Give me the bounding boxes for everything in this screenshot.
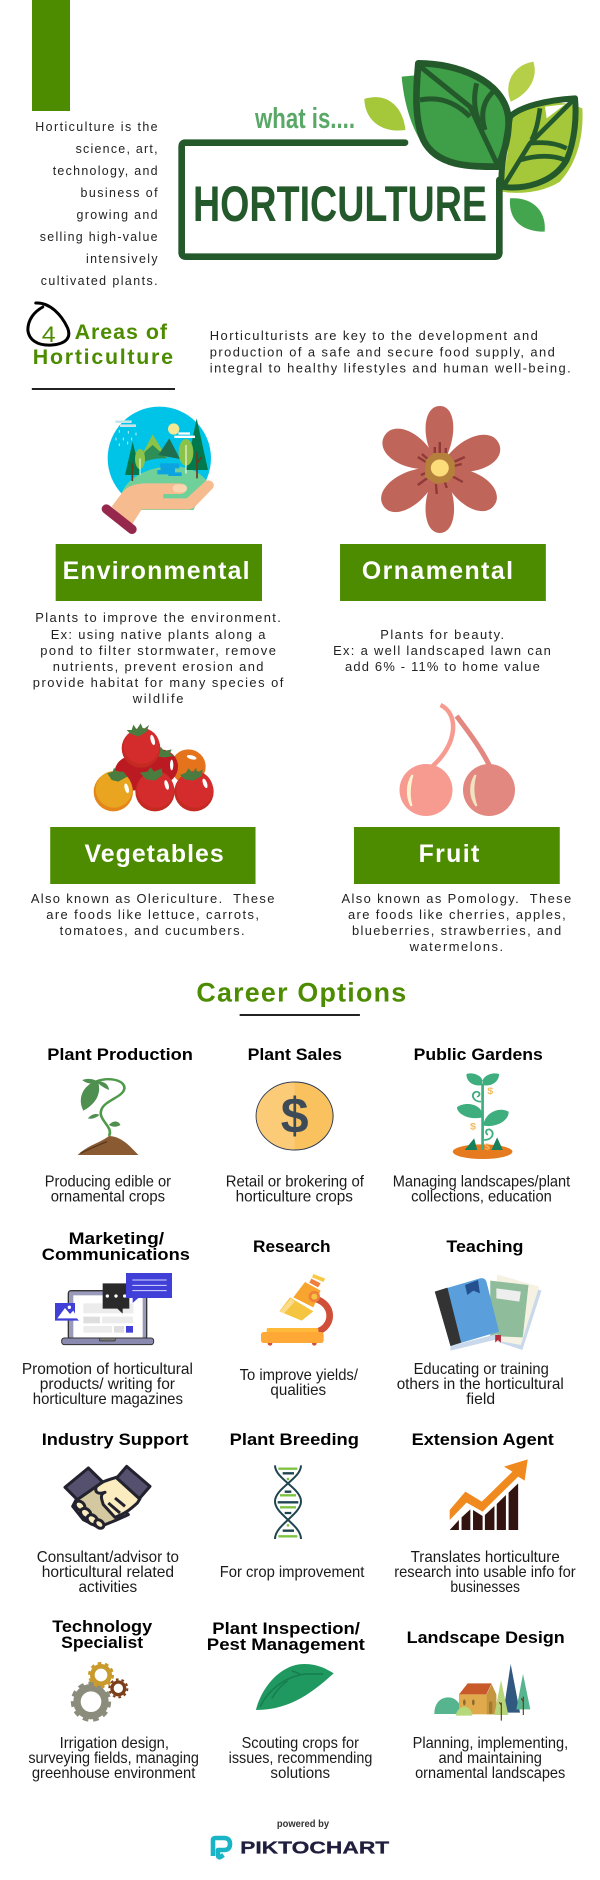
text: fruit description: blueberries, strawberries, and [352, 923, 561, 938]
icon: tomatoes [94, 723, 214, 811]
career: public gardens: collections, education [411, 1188, 552, 1206]
career: landscape design [407, 1629, 568, 1782]
logo: what is horticulture: HORTICULTURE [193, 176, 487, 232]
label bar: environmental [56, 544, 262, 601]
career: plant production: Plant Production [47, 1046, 193, 1064]
top green accent bar [32, 0, 70, 111]
icon: money plant: $ [470, 1122, 476, 1132]
text: ornamental description: Plants for beauty. [380, 627, 504, 642]
icon: dollar coin [256, 1082, 333, 1150]
label bar: vegetables [50, 827, 256, 884]
career: plant production [45, 1046, 193, 1206]
career: technology specialist: Specialist [61, 1634, 144, 1652]
intro text block: business of [81, 186, 158, 200]
career: technology specialist: greenhouse environment [32, 1765, 196, 1782]
icon: money plant [453, 1073, 512, 1159]
icon: hand holding landscape [106, 407, 214, 529]
career: teaching [397, 1238, 564, 1408]
career heading underline [240, 1014, 360, 1016]
intro text block: Horticulture is the [35, 120, 158, 134]
label bar: fruit [354, 827, 560, 884]
intro paragraph: integral to healthy lifestyles and human well-being. [210, 360, 571, 375]
heading: career options: Career Options [196, 977, 406, 1008]
career: plant sales: Retail or brokering of [226, 1173, 364, 1191]
career: marketing communications: products/ writing for [40, 1376, 176, 1393]
text: fruit description: Also known as Pomology. These [342, 891, 571, 906]
icon: microscope [261, 1274, 330, 1346]
icon: dollar coin: $ [281, 1088, 309, 1144]
icon: books [435, 1274, 541, 1351]
icon: flower [374, 406, 505, 533]
intro text block: selling high-value [40, 230, 158, 244]
career: teaching: field [466, 1391, 495, 1408]
career: marketing communications [22, 1230, 193, 1408]
label bar: ornamental [340, 544, 546, 601]
career: technology specialist [28, 1618, 199, 1782]
career: marketing communications: horticulture magazines [33, 1391, 183, 1408]
text: vegetables description: Also known as Olericulture. These [31, 891, 274, 906]
panel: fruit [342, 705, 571, 954]
career: industry support [37, 1431, 189, 1596]
icon: dna helix [275, 1465, 301, 1539]
text: vegetables description: tomatoes, and cucumbers. [60, 923, 245, 938]
career: landscape design: Landscape Design [407, 1629, 565, 1647]
career: plant breeding: For crop improvement [220, 1564, 365, 1581]
footer: powered by piktochart: powered by [277, 1819, 329, 1830]
career: teaching: others in the horticultural [397, 1376, 564, 1393]
intro text block: technology, and [53, 164, 158, 178]
career: research: qualities [270, 1382, 326, 1399]
text: fruit description [342, 891, 571, 954]
icon: money plant: $ [487, 1087, 494, 1097]
career: landscape design: ornamental landscapes [415, 1765, 565, 1782]
career: plant breeding [220, 1431, 365, 1581]
career: extension agent: Extension Agent [412, 1431, 554, 1449]
career: plant inspection pest management: solutions [270, 1765, 330, 1782]
label bar: vegetables: Vegetables [85, 840, 224, 868]
career: extension agent [394, 1431, 576, 1596]
logo: what is horticulture [182, 62, 583, 257]
text: ornamental description [333, 627, 551, 674]
career: plant sales: Plant Sales [248, 1046, 342, 1064]
career: plant inspection pest management: Pest Management [207, 1636, 365, 1654]
heading: 4 areas of horticulture: Horticulture [33, 345, 173, 369]
text: fruit description: watermelons. [409, 939, 503, 954]
label bar: fruit: Fruit [419, 840, 479, 868]
career: industry support: activities [79, 1579, 137, 1596]
icon: cherries [400, 705, 515, 816]
icon: gears [73, 1663, 127, 1720]
career: research: To improve yields/ [240, 1367, 358, 1384]
intro paragraph: Horticulturists are key to the development and [210, 328, 538, 343]
career: landscape design: Planning, implementing, [413, 1735, 568, 1752]
panel: environmental [33, 407, 284, 706]
intro text block: growing and [77, 208, 158, 222]
text: environmental description [33, 610, 284, 706]
icon: laptop with chat bubbles [55, 1273, 172, 1345]
career: extension agent: businesses [450, 1579, 520, 1596]
label bar: ornamental: Ornamental [362, 557, 513, 585]
text: ornamental description: add 6% - 11% to home value [345, 659, 540, 674]
text: environmental description: nutrients, prevent erosion and [53, 659, 263, 674]
heading underline [32, 388, 175, 390]
heading: 4 areas of horticulture: 4 [42, 322, 56, 347]
career: public gardens: Managing landscapes/plant [393, 1173, 571, 1191]
intro text block: cultivated plants. [41, 274, 158, 288]
intro paragraph: production of a safe and secure food supply, and [210, 344, 555, 359]
intro paragraph [210, 328, 571, 375]
icon: house and trees [434, 1664, 530, 1721]
icon: leaf [256, 1664, 334, 1710]
career: plant sales [226, 1046, 364, 1206]
career: industry support: Industry Support [42, 1431, 189, 1449]
career: plant inspection pest management: Scouting crops for [242, 1735, 360, 1752]
text: ornamental description: Ex: a well landscaped lawn can [333, 643, 551, 658]
career: plant production: ornamental crops [51, 1188, 165, 1206]
panel: ornamental [333, 406, 551, 674]
heading: 4 areas of horticulture: Areas of [75, 320, 168, 344]
intro text block [35, 120, 158, 288]
career: research [240, 1238, 358, 1399]
career: public gardens [393, 1046, 571, 1206]
career: plant sales: horticulture crops [236, 1188, 353, 1206]
career: plant inspection pest management: Plant Inspection/ [212, 1620, 360, 1638]
career: public gardens: Public Gardens [414, 1046, 543, 1064]
career: landscape design: and maintaining [438, 1750, 542, 1767]
footer: powered by piktochart [213, 1819, 389, 1858]
text: environmental description: Plants to improve the environment. [35, 610, 281, 625]
career: research: Research [253, 1238, 331, 1256]
career: extension agent: research into usable info for [394, 1564, 576, 1581]
career: plant inspection pest management: issues, recommending [229, 1750, 372, 1767]
career: marketing communications: Communications [42, 1246, 190, 1264]
career: teaching: Educating or training [414, 1361, 549, 1378]
career: technology specialist: Technology [52, 1618, 153, 1636]
career: industry support: Consultant/advisor to [37, 1549, 179, 1566]
text: environmental description: provide habitat for many species of [33, 675, 284, 690]
text: environmental description: Ex: using native plants along a [51, 627, 266, 642]
career: plant inspection pest management [207, 1620, 372, 1782]
logo: what is horticulture: what is.... [254, 103, 355, 135]
icon: growth chart arrow [450, 1459, 528, 1530]
intro text block: science, art, [76, 142, 158, 156]
career: marketing communications: Promotion of horticultural [22, 1361, 193, 1378]
label bar: environmental: Environmental [63, 557, 250, 585]
panel: vegetables [31, 723, 274, 938]
career: plant production: Producing edible or [45, 1173, 172, 1191]
career: teaching: Teaching [446, 1238, 523, 1256]
career: technology specialist: surveying fields, managing [28, 1750, 199, 1767]
text: vegetables description [31, 891, 274, 938]
career: industry support: horticultural related [42, 1564, 174, 1581]
text: fruit description: are foods like cherries, apples, [348, 907, 566, 922]
icon: seedling [78, 1079, 138, 1155]
career: plant breeding: Plant Breeding [230, 1431, 359, 1449]
text: environmental description: wildlife [132, 691, 183, 706]
text: environmental description: pond to filter stormwater, remove [40, 643, 276, 658]
career: marketing communications: Marketing/ [69, 1230, 165, 1248]
intro text block: intensively [86, 252, 158, 266]
career: extension agent: Translates horticulture [411, 1549, 560, 1566]
text: vegetables description: are foods like lettuce, carrots, [46, 907, 259, 922]
heading: 4 areas of horticulture [28, 303, 173, 369]
icon: money plant: $ [484, 1142, 491, 1151]
career: technology specialist: Irrigation design, [60, 1735, 169, 1752]
icon: piktochart logo mark [213, 1838, 230, 1857]
footer: powered by piktochart: PIKTOCHART [240, 1837, 389, 1858]
icon: handshake [65, 1466, 150, 1530]
